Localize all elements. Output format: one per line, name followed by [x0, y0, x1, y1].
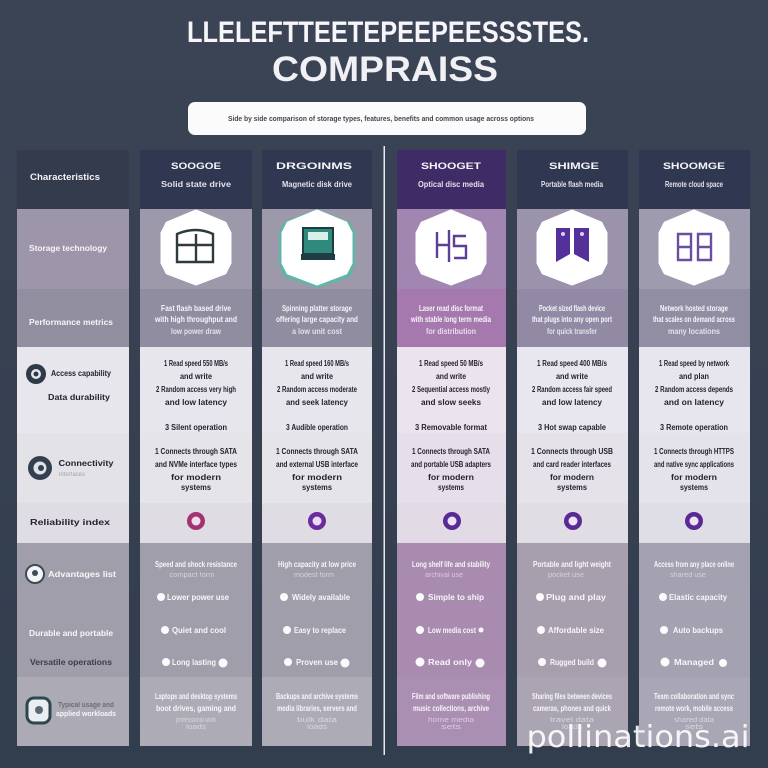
- description: for distribution: [426, 327, 476, 336]
- benefit list: [278, 560, 356, 668]
- usage text: home media: [428, 717, 474, 724]
- usage text: Team collaboration and sync: [654, 692, 734, 701]
- feature list one: and seek latency: [286, 398, 349, 407]
- description: with high throughput and: [154, 315, 237, 324]
- usage text: Film and software publishing: [412, 692, 490, 701]
- description: Network hosted storage: [660, 304, 728, 313]
- feature list one: 3 Silent operation: [165, 423, 227, 432]
- description: with stable long term media: [410, 315, 491, 324]
- title: COMPRAISS: [272, 50, 498, 89]
- feature list two: systems: [438, 483, 464, 492]
- rating badge: [564, 512, 582, 530]
- benefit list: Lower power use: [167, 593, 230, 602]
- benefit list: Read only: [428, 658, 473, 667]
- subtitle bar: Side by side comparison of storage types, features, benefits and common usage across options: [228, 114, 534, 123]
- benefit list: Managed: [674, 658, 714, 667]
- column: row labels: applied workloads: [56, 709, 116, 718]
- benefit list: compact form: [170, 572, 215, 579]
- benefit list: Long lasting: [172, 658, 216, 667]
- benefit list: Plug and play: [546, 593, 607, 602]
- icon: second feature: [28, 456, 52, 480]
- feature list one: and write: [436, 372, 466, 381]
- description: [532, 304, 612, 336]
- feature list one: and write: [180, 372, 212, 381]
- feature list two: systems: [680, 483, 708, 492]
- feature list two: 1 Connects through SATA: [155, 447, 237, 456]
- feature list one: [655, 359, 733, 432]
- benefit list: Long shelf life and stability: [412, 560, 490, 569]
- benefit list: Speed and shock resistance: [155, 560, 237, 569]
- usage text: media libraries, servers and: [277, 704, 357, 713]
- column: row labels: interfaces: [59, 472, 85, 478]
- column: row labels: Typical usage and: [58, 702, 114, 709]
- benefit list: Access from any place online: [654, 560, 734, 569]
- usage text: loads: [307, 724, 328, 731]
- description: [410, 304, 491, 336]
- feature list two: 1 Connects through USB: [531, 447, 613, 456]
- benefit list: Affordable size: [548, 626, 605, 635]
- usage text: [532, 692, 612, 731]
- feature list two: and card reader interfaces: [533, 460, 611, 469]
- rating badge: [443, 512, 461, 530]
- feature list one: and slow seeks: [421, 398, 482, 407]
- feature list one: 1 Read speed 50 MB/s: [419, 359, 483, 368]
- usage text: sets: [441, 724, 462, 731]
- benefit list: Auto backups: [673, 626, 724, 635]
- icon: storage emblem: [162, 211, 230, 284]
- usage text: [276, 692, 358, 731]
- feature list one: and write: [556, 372, 588, 381]
- title: [187, 16, 589, 89]
- column: row labels: Connectivity: [58, 459, 114, 468]
- benefit list: Simple to ship: [428, 593, 484, 602]
- description: offering large capacity and: [276, 315, 358, 324]
- description: [653, 304, 735, 336]
- benefit list: Portable and light weight: [533, 560, 611, 569]
- column: row labels: [17, 150, 129, 746]
- column 1: Solid state drive: [161, 180, 232, 189]
- column: row labels: Advantages list: [48, 570, 116, 579]
- icon: purple book emblem: [538, 211, 606, 284]
- benefit list: High capacity at low price: [278, 560, 356, 569]
- feature list one: [532, 359, 612, 432]
- description: Spinning platter storage: [282, 304, 352, 313]
- benefit list: modest form: [294, 572, 334, 579]
- icon: first feature: [26, 364, 46, 384]
- benefit list: [155, 560, 237, 668]
- usage text: cameras, phones and quick: [533, 704, 611, 713]
- usage text: boot drives, gaming and: [156, 704, 236, 713]
- label: header: Characteristics: [30, 172, 100, 183]
- label: sub row one: Durable and portable: [29, 629, 114, 638]
- description: low power draw: [171, 327, 222, 336]
- column 5: [639, 150, 750, 746]
- icon: fourth feature: [27, 698, 50, 723]
- description: many locations: [668, 327, 720, 336]
- column: row labels: Data durability: [48, 393, 111, 402]
- column 2: [262, 150, 372, 746]
- subtitle bar: [188, 102, 586, 135]
- feature list one: 2 Sequential access mostly: [412, 385, 490, 394]
- benefit list: archival use: [425, 572, 463, 579]
- usage text: Laptops and desktop systems: [155, 692, 237, 701]
- label: sub row two: Versatile operations: [30, 658, 113, 667]
- feature list two: and NVMe interface types: [155, 460, 237, 469]
- watermark: pollinations.ai: [526, 720, 750, 755]
- benefit list: [412, 560, 490, 668]
- feature list one: and low latency: [542, 398, 603, 407]
- column heading: SHOOGET: [421, 161, 481, 172]
- feature list one: and write: [301, 372, 333, 381]
- column 3 highlighted: Optical disc media: [418, 180, 485, 189]
- column heading: DRGOINMS: [276, 161, 352, 172]
- feature list two: [155, 447, 237, 492]
- icon: purple grid emblem: [660, 211, 728, 284]
- usage text: sets: [685, 724, 704, 731]
- feature list two: [654, 447, 735, 492]
- description: Fast flash based drive: [161, 304, 231, 313]
- feature list one: 1 Read speed 550 MB/s: [164, 359, 228, 368]
- feature list two: for modern: [671, 473, 717, 482]
- icon: teal book emblem: [279, 209, 355, 288]
- feature list two: systems: [302, 483, 333, 492]
- benefit list: shared use: [670, 572, 706, 579]
- feature list two: 1 Connects through SATA: [276, 447, 358, 456]
- feature list one: 1 Read speed 400 MB/s: [537, 359, 607, 368]
- feature list one: [277, 359, 357, 432]
- feature list two: [531, 447, 613, 492]
- feature list two: systems: [181, 483, 212, 492]
- feature list one: 1 Read speed by network: [659, 359, 729, 368]
- title: LLELEFTTEETEPEEPEESSSTES.: [187, 16, 589, 49]
- rating badge: [187, 512, 205, 530]
- benefit list: Elastic capacity: [669, 593, 728, 602]
- benefit list: pocket use: [548, 572, 584, 579]
- column 4: [517, 150, 628, 746]
- description: [154, 304, 237, 336]
- feature list two: [276, 447, 358, 492]
- usage text: travel data: [550, 717, 594, 724]
- benefit list: Low media cost: [428, 626, 476, 635]
- description: [276, 304, 358, 336]
- usage text: Sharing files between devices: [532, 692, 612, 701]
- description: that plugs into any open port: [532, 315, 612, 324]
- rating badge: [308, 512, 326, 530]
- feature list one: 3 Audible operation: [286, 423, 348, 432]
- feature list two: for modern: [550, 473, 594, 482]
- usage text: loads: [562, 724, 583, 731]
- label: description row: Performance metrics: [29, 318, 114, 327]
- feature list two: and external USB interface: [276, 460, 358, 469]
- usage text: loads: [186, 724, 207, 731]
- benefit list: [654, 560, 734, 667]
- column heading: SOOGOE: [171, 161, 221, 172]
- feature list one: 2 Random access moderate: [277, 385, 357, 394]
- feature list two: and native sync applications: [654, 460, 734, 469]
- description: that scales on demand across: [653, 315, 735, 324]
- feature list one: 1 Read speed 160 MB/s: [285, 359, 349, 368]
- benefit list: Widely available: [292, 593, 351, 602]
- column 5: Remote cloud space: [665, 180, 723, 189]
- column 1: [140, 150, 252, 746]
- feature list one: [156, 359, 236, 432]
- feature list one: 2 Random access fair speed: [532, 385, 612, 394]
- feature list one: and low latency: [165, 398, 228, 407]
- column heading: SHIMGE: [549, 161, 599, 172]
- label: icon row: Storage technology: [29, 244, 108, 253]
- feature list one: and on latency: [664, 398, 725, 407]
- feature list two: systems: [557, 483, 588, 492]
- description: for quick transfer: [547, 327, 597, 336]
- feature list two: 1 Connects through HTTPS: [654, 447, 735, 456]
- column 2: Magnetic disk drive: [282, 180, 353, 189]
- usage text: shared data: [674, 717, 714, 724]
- usage text: music collections, archive: [413, 704, 489, 713]
- benefit list: [533, 560, 611, 668]
- feature list one: and plan: [679, 372, 709, 381]
- usage text: remote work, mobile access: [655, 704, 733, 713]
- rating badge: [685, 512, 703, 530]
- benefit list: Quiet and cool: [172, 626, 226, 635]
- usage text: [654, 692, 734, 731]
- benefit list: Easy to replace: [294, 626, 346, 635]
- usage text: bulk data: [297, 717, 337, 724]
- icon: purple emblem: [417, 211, 485, 284]
- feature list two: for modern: [171, 473, 221, 482]
- feature list one: 3 Remote operation: [660, 423, 728, 432]
- column 4: Portable flash media: [541, 180, 603, 189]
- description: a low unit cost: [292, 327, 342, 336]
- usage text: Backups and archive systems: [276, 692, 358, 701]
- feature list two: [411, 447, 491, 492]
- vertical divider: [384, 146, 385, 755]
- icon: third feature: [26, 565, 44, 583]
- feature list one: 2 Random access depends: [655, 385, 733, 394]
- feature list two: and portable USB adapters: [411, 460, 491, 469]
- column 3 highlighted: [397, 150, 506, 746]
- label: rating row: Reliability index: [30, 518, 111, 527]
- feature list one: [412, 359, 490, 432]
- feature list two: 1 Connects through SATA: [412, 447, 490, 456]
- description: Pocket sized flash device: [539, 304, 605, 313]
- feature list two: for modern: [428, 473, 474, 482]
- description: Laser read disc format: [419, 304, 483, 313]
- feature list one: 3 Removable format: [415, 423, 487, 432]
- usage text: professional work: [176, 717, 216, 724]
- feature list one: 3 Hot swap capable: [538, 423, 607, 432]
- column heading: SHOOMGE: [663, 161, 725, 172]
- usage text: [155, 692, 237, 731]
- column: row labels: Access capability: [51, 369, 111, 378]
- usage text: [412, 692, 490, 731]
- feature list one: 2 Random access very high: [156, 385, 236, 394]
- benefit list: Rugged build: [550, 658, 594, 667]
- feature list two: for modern: [292, 473, 342, 482]
- benefit list: Proven use: [296, 658, 339, 667]
